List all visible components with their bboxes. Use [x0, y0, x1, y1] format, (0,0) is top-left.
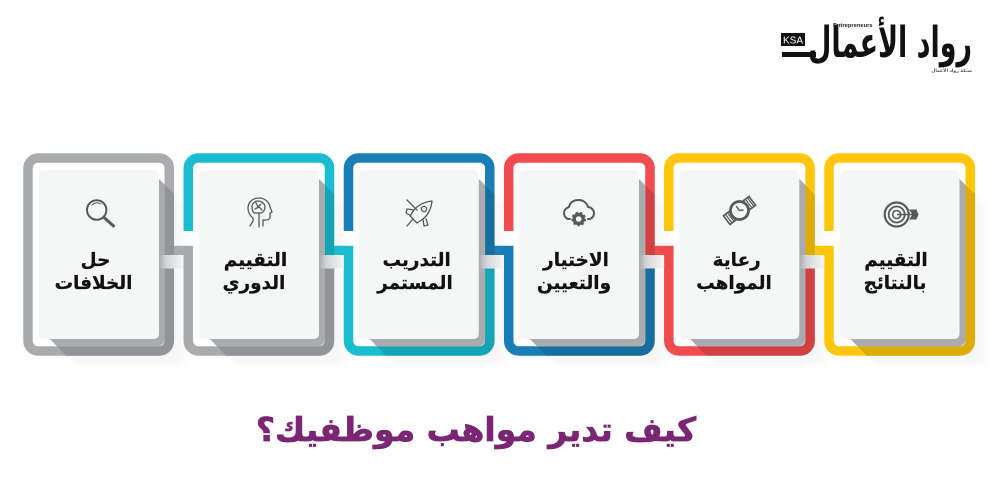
logo subtitle: Entrepreneurs: Entrepreneurs — [833, 23, 873, 29]
label: talent care: رعاية — [713, 250, 761, 271]
icon: head with brain — [248, 198, 272, 227]
soft long shadows behind the frames — [50, 179, 985, 365]
panel: periodic evaluation — [199, 170, 347, 368]
label: continuous training: التدريب — [383, 250, 451, 271]
label: conflict resolution: حل — [81, 250, 110, 271]
label: results evaluation: التقييم — [864, 250, 928, 271]
label: periodic evaluation — [223, 250, 287, 295]
icon: target with arrow — [885, 202, 918, 226]
logo badge: KSA — [781, 33, 805, 46]
icon: wristwatch — [721, 194, 758, 227]
panel: selection and hiring — [519, 170, 667, 368]
panel: talent care — [680, 170, 827, 368]
connected frame ribbon in six colours — [28, 158, 970, 351]
label: selection and hiring — [537, 250, 611, 294]
panel: conflict resolution — [39, 170, 187, 368]
panel: continuous training — [359, 170, 507, 368]
icon: rocket — [406, 200, 432, 226]
label: selection and hiring: الاختيار — [542, 250, 609, 271]
label: periodic evaluation: التقييم — [224, 250, 287, 271]
label: talent care — [696, 250, 772, 294]
title: كيف تدير مواهب موظفيك؟ — [256, 410, 697, 450]
icon: magnifying glass — [87, 200, 114, 226]
logo — [781, 16, 973, 74]
label: talent care: المواهب — [696, 273, 772, 294]
label: selection and hiring: والتعيين — [537, 273, 611, 294]
label: results evaluation — [864, 250, 928, 294]
panel: results evaluation — [840, 170, 975, 356]
label: results evaluation: بالنتائج — [864, 273, 926, 294]
logo badge: KSA: KSA — [783, 36, 803, 46]
logo tail — [782, 52, 816, 57]
label: continuous training: المستمر — [376, 273, 453, 294]
label: continuous training — [376, 250, 453, 294]
label: conflict resolution — [55, 250, 132, 294]
logo tagline: شبكة رواد الأعمال — [931, 67, 973, 74]
label: periodic evaluation: الدوري — [223, 273, 285, 295]
icon: cloud with gear — [564, 200, 594, 225]
label: conflict resolution: الخلافات — [55, 273, 132, 294]
